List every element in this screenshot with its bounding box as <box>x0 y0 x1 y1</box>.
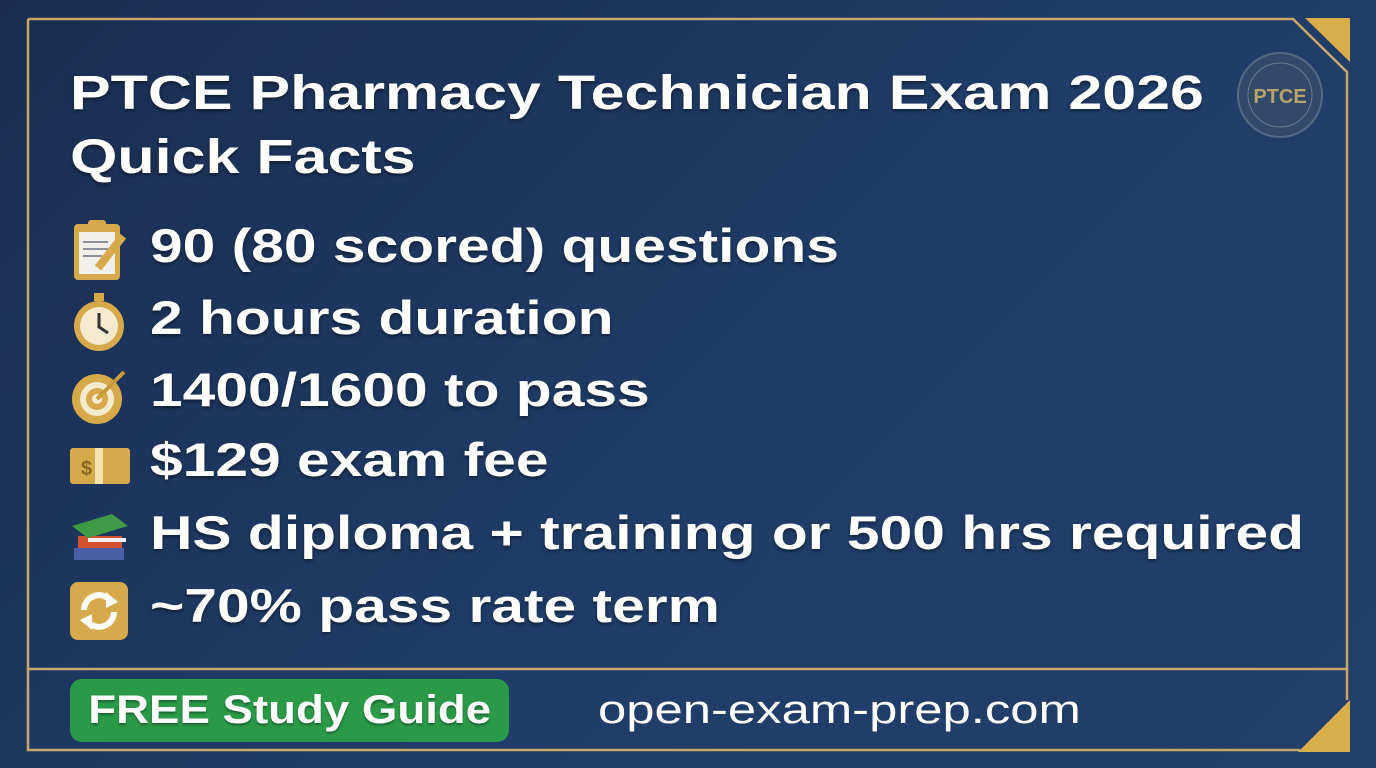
item: fee: $129 exam fee <box>150 433 549 486</box>
item: requirement: HS diploma + training or 500 hrs required <box>150 506 1304 559</box>
title: Quick Facts <box>70 131 416 184</box>
button: FREE Study Guide: FREE Study Guide <box>88 688 491 732</box>
badge: PTCE seal: PTCE <box>1253 86 1307 108</box>
item: passing score: 1400/1600 to pass <box>150 363 650 416</box>
title <box>70 67 1204 186</box>
item: duration: 2 hours duration <box>150 291 613 344</box>
badge: PTCE seal <box>1237 52 1323 138</box>
icon: money: $ <box>81 458 92 480</box>
icon: target <box>72 370 126 424</box>
icon: refresh <box>70 582 128 640</box>
title: PTCE Pharmacy Technician Exam 2026 <box>70 67 1204 120</box>
icon: books <box>72 514 128 560</box>
url: open-exam-prep.com <box>598 688 1081 732</box>
item: questions: 90 (80 scored) questions <box>150 219 839 272</box>
icon: money <box>70 448 130 484</box>
icon: stopwatch <box>74 293 124 351</box>
button: FREE Study Guide <box>70 679 509 742</box>
item: pass rate: ~70% pass rate term <box>150 579 720 632</box>
icon: clipboard <box>74 220 126 280</box>
